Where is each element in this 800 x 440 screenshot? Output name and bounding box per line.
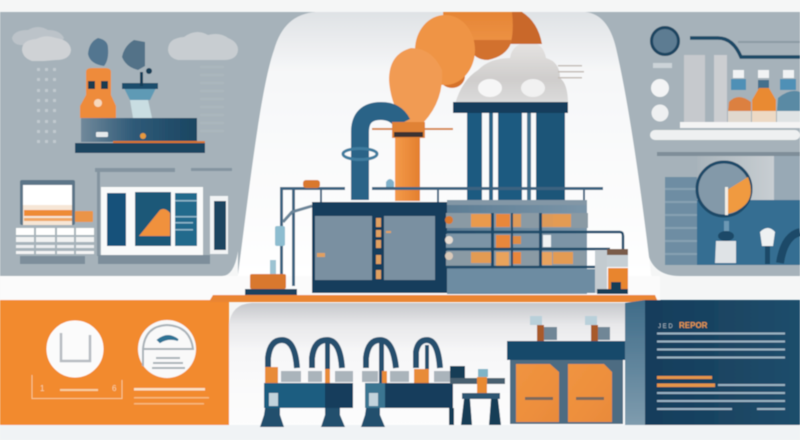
- indicator button bottom: [652, 104, 668, 122]
- display: list lines: [175, 200, 197, 230]
- machine left body: [312, 202, 447, 293]
- row dividers: [491, 213, 542, 268]
- blue machine wall: [697, 200, 800, 265]
- orange blocks: [265, 367, 429, 383]
- dark arch: [780, 232, 800, 263]
- railing: [280, 187, 603, 287]
- gauge stem: [724, 221, 729, 231]
- steam lines: [558, 65, 584, 78]
- tower platform: [453, 102, 568, 113]
- icon: leaf shape two: [122, 40, 145, 70]
- machine right body: [447, 204, 587, 294]
- conveyor table one: [264, 383, 353, 408]
- screen readouts: [317, 218, 391, 279]
- tower columns: [467, 113, 565, 201]
- wall block light: [697, 156, 774, 200]
- pipe ring: [343, 148, 377, 160]
- caption: left bracket: 1: [40, 384, 45, 393]
- lower shelf: [650, 130, 800, 140]
- chimney flange: [372, 128, 453, 130]
- icon: right cloud: [168, 32, 238, 60]
- roof unit left: [530, 316, 557, 341]
- status row three: [445, 251, 586, 266]
- report heading orange: REPOR: [679, 321, 708, 330]
- equipment: orange cabinet: [507, 316, 626, 424]
- back rail: [657, 152, 800, 156]
- monitor: [20, 180, 75, 225]
- panel: left laboratory illustration: [12, 27, 238, 264]
- gauge label bar: [653, 63, 672, 68]
- equipment: small transfer machine: [449, 366, 505, 425]
- orange top smoke plume: [443, 12, 513, 46]
- cabinet door left: [516, 364, 559, 422]
- grey overhead rail: [738, 41, 800, 43]
- grey boxes: [281, 371, 451, 382]
- display: list panel: [175, 193, 197, 246]
- stacked blocks: [665, 177, 697, 265]
- panel: report side face: [625, 300, 645, 425]
- dark plume tip: [505, 12, 542, 44]
- side display: [210, 196, 228, 254]
- conveyor table two: [365, 383, 453, 408]
- table two light: [365, 383, 385, 408]
- white footer strip: [0, 425, 800, 440]
- icon: plant basin: [122, 68, 158, 118]
- main display window: [101, 187, 203, 255]
- report orange subheading: [657, 376, 715, 387]
- machine housing: [81, 118, 197, 142]
- display: orange triangle: [139, 209, 170, 236]
- panel: orange info panel: [0, 300, 229, 425]
- data table: [16, 228, 94, 254]
- frame rails: [95, 168, 232, 256]
- icon: leaf shape one: [88, 38, 108, 66]
- panel: equipment bay: [229, 303, 645, 425]
- cabinet door right: [568, 364, 612, 422]
- left device: [245, 260, 297, 295]
- arches: [268, 340, 440, 368]
- white central arch: [237, 12, 652, 282]
- table feet: [260, 408, 385, 427]
- panel: central factory: [245, 12, 628, 295]
- orange smoke lower blob: [389, 48, 442, 122]
- blue pipe: [360, 111, 402, 200]
- chimney collar: [392, 122, 425, 138]
- collar stripe: [394, 132, 423, 137]
- equipment: press line: [260, 340, 453, 427]
- orange smoke shade: [470, 40, 512, 60]
- orange shelf bar: [210, 295, 658, 302]
- table one shade: [325, 383, 353, 408]
- right device: [597, 249, 628, 294]
- technician figure: [760, 228, 775, 264]
- icon: gate circle: [47, 321, 103, 377]
- upper shelf: [680, 122, 800, 128]
- machine top cap: [447, 200, 587, 205]
- label plate: [96, 132, 108, 137]
- tall cylinder: [684, 55, 705, 122]
- dot grid: right rain: [200, 66, 224, 132]
- indicator button top: [651, 79, 669, 97]
- orange tab: [75, 211, 93, 222]
- panel: right laboratory illustration: [650, 26, 800, 265]
- icon: rain cloud: [22, 36, 71, 61]
- roof unit right: [585, 316, 610, 341]
- icon: dome circle: [138, 320, 196, 378]
- grey backdrop panel: [0, 12, 800, 276]
- door handles: [525, 397, 604, 400]
- caption: right text: [134, 388, 209, 404]
- status row one: [445, 213, 588, 228]
- arch center posts: [325, 340, 429, 384]
- platform: [75, 143, 205, 153]
- dark feed pipe: [690, 38, 800, 57]
- orange smoke mid blob: [415, 15, 475, 85]
- orange strip: [113, 141, 205, 144]
- white steam cloud: [455, 42, 568, 104]
- white band below panels: [0, 276, 660, 302]
- indicator light: [140, 133, 146, 139]
- display: left panel: [107, 193, 126, 246]
- display base: [98, 255, 210, 264]
- bottle one: [728, 70, 751, 122]
- caption: left bracket: [32, 375, 122, 398]
- orange chimney pipe: [395, 135, 420, 201]
- icon: dial gauge: [650, 26, 680, 56]
- cabinet body: [510, 359, 623, 424]
- cabinet top: [507, 341, 626, 360]
- orange valve: [303, 180, 320, 188]
- sample cup: [715, 241, 736, 263]
- left screen: [315, 216, 372, 280]
- report heading: J E D: [658, 324, 673, 330]
- table base: [20, 256, 85, 264]
- dot grid: left rain: [37, 68, 56, 143]
- wall block: [774, 156, 800, 201]
- orange smoke lower shade: [439, 64, 465, 88]
- table plates: [269, 393, 378, 406]
- gauge knob: [718, 231, 734, 241]
- report body lines: [657, 332, 785, 410]
- icon: orange robot: [80, 68, 116, 118]
- robot arm: [283, 206, 312, 222]
- right screen: [384, 216, 435, 280]
- panel: dark report: [645, 300, 800, 425]
- machine right section: [595, 250, 607, 293]
- status row two: [445, 234, 586, 248]
- bottle three: [777, 70, 800, 122]
- display: chart panel: [135, 192, 171, 246]
- small cylinder: [714, 55, 727, 122]
- coolant pipes: [446, 232, 623, 267]
- bottle two: [752, 70, 776, 122]
- machine lower base: [447, 269, 595, 293]
- icon: magnifying gauge: [697, 162, 751, 216]
- blue valve: [386, 179, 394, 187]
- icon: back cloud: [12, 27, 64, 45]
- control machine: [312, 200, 623, 294]
- lab bottle: [275, 226, 285, 246]
- caption: left bracket: 6: [112, 384, 117, 393]
